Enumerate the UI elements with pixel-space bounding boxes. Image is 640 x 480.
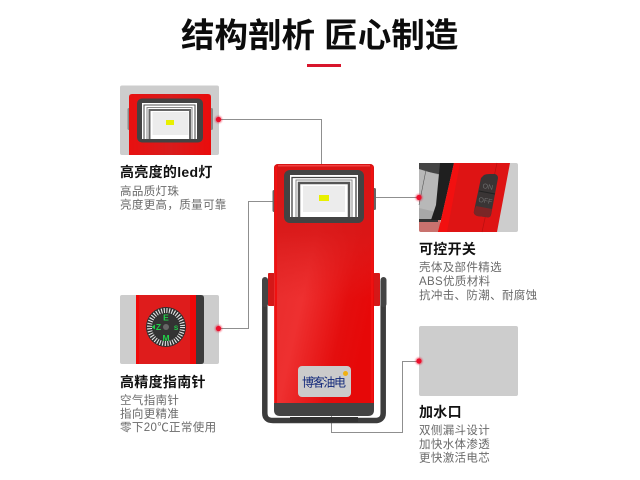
connector dot bbox=[415, 194, 423, 201]
panel: compass bbox=[120, 295, 222, 434]
description: 加快水体渗透 bbox=[419, 437, 490, 451]
description: 双侧漏斗设计 bbox=[419, 424, 490, 437]
heading: 高亮度的led灯 bbox=[120, 164, 213, 180]
brand plate: 博客油电 bbox=[302, 374, 346, 390]
description: 空气指南针 bbox=[120, 393, 179, 407]
description: 壳体及部件精选 bbox=[419, 260, 502, 274]
description: 更快激活电芯 bbox=[419, 450, 490, 464]
body side highlights bbox=[275, 165, 373, 403]
thumbnail: blank bbox=[419, 326, 518, 396]
description: 高品质灯珠 bbox=[120, 184, 179, 198]
folding stand bbox=[262, 273, 386, 422]
panel: led lamp bbox=[120, 86, 227, 212]
side knobs bbox=[272, 190, 276, 212]
thumbnail: led lamp bbox=[120, 86, 219, 155]
product: main lamp bbox=[262, 164, 386, 422]
thumbnail: compass: M bbox=[162, 333, 170, 343]
panel: switch bbox=[415, 163, 538, 302]
thumbnail: switch bbox=[419, 163, 518, 232]
title: 结构剖析 匠心制造 bbox=[181, 18, 458, 55]
panel: water inlet bbox=[415, 326, 518, 464]
description: 亮度更高，质量可靠 bbox=[120, 198, 227, 212]
thumbnail: compass: E bbox=[163, 312, 169, 322]
thumbnail: switch: ON bbox=[482, 183, 494, 192]
description: 抗冲击、防潮、耐腐蚀 bbox=[419, 288, 538, 302]
connector dot bbox=[215, 116, 222, 123]
connector dot bbox=[215, 325, 222, 332]
connector lines bbox=[219, 120, 419, 432]
description: ABS优质材料 bbox=[419, 274, 491, 288]
thumbnail: switch: OFF bbox=[478, 197, 493, 206]
heading: 高精度指南针 bbox=[120, 374, 206, 390]
brand plate bbox=[298, 366, 351, 397]
description: 指向更精准 bbox=[120, 406, 179, 420]
body top shading bbox=[274, 164, 374, 409]
lamp base bbox=[274, 403, 374, 416]
thumbnail: compass bbox=[120, 295, 219, 364]
connector dot bbox=[415, 357, 423, 365]
title accent bar bbox=[307, 64, 341, 67]
lamp body bbox=[274, 164, 374, 409]
description: 零下20℃正常使用 bbox=[120, 420, 216, 434]
heading: 可控开关 bbox=[419, 241, 476, 257]
lamp head bbox=[284, 170, 364, 223]
thumbnail: compass: S bbox=[174, 325, 179, 332]
thumbnail: compass: Z bbox=[156, 322, 161, 332]
heading: 加水口 bbox=[419, 404, 462, 420]
